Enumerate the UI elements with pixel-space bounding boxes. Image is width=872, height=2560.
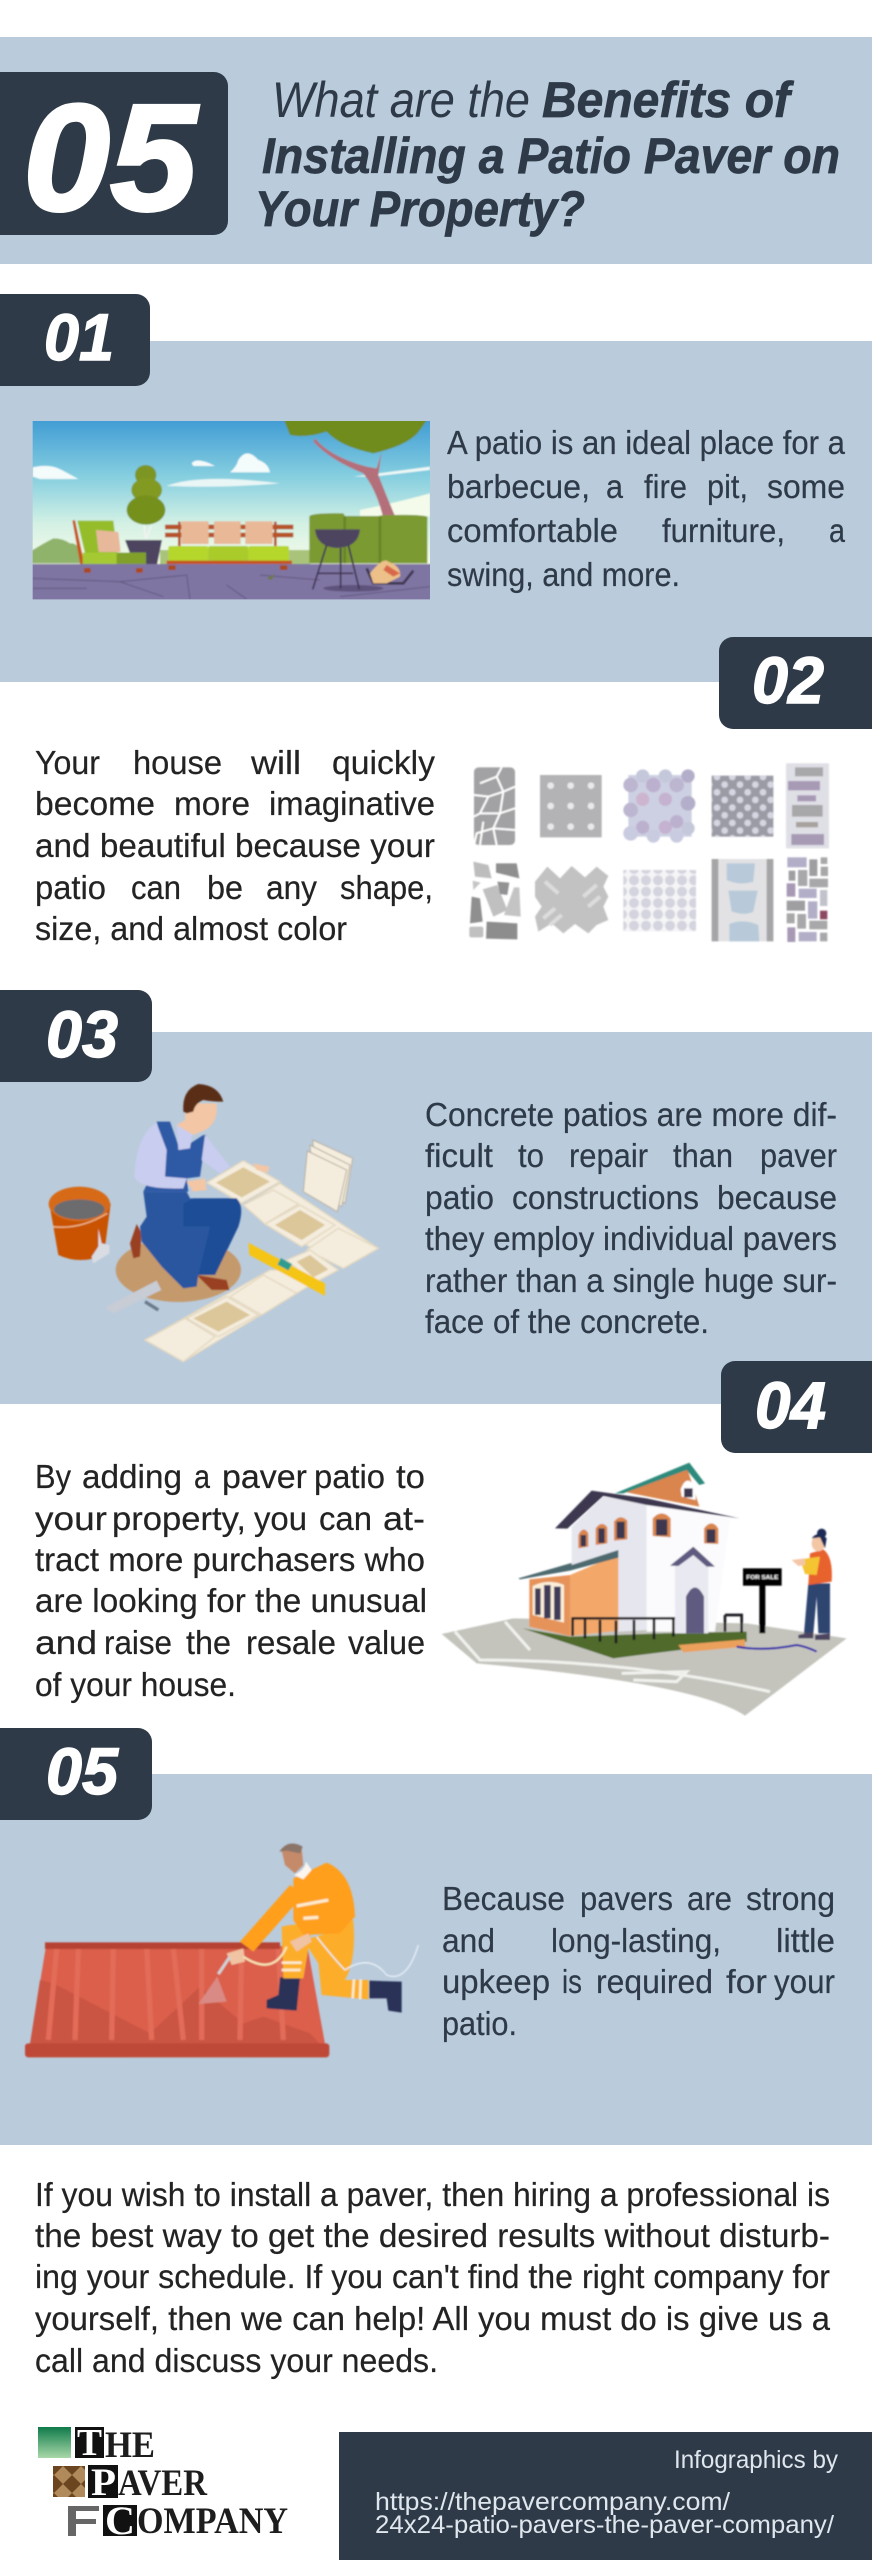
- for sale sign: FOR SALE: [746, 1575, 779, 1581]
- text: section 3: paver: [760, 1137, 837, 1174]
- text: section 5: long-lasting,: [551, 1922, 721, 1959]
- illustration: man pressure washing paver surface: [25, 1843, 418, 2057]
- text: section 3: to: [518, 1137, 544, 1174]
- panel: section 5 band: [0, 1774, 872, 2145]
- text: section 4: [35, 1458, 427, 1703]
- text: section 2: become: [35, 785, 155, 822]
- panel: footer credit: https://thepavercompany.com/: [375, 2488, 730, 2516]
- text: closing paragraph: call and discuss your needs.: [35, 2342, 438, 2379]
- badge: 04: 04: [755, 1368, 826, 1442]
- swatch: diamond lattice: [712, 776, 773, 837]
- text: section 4: value: [348, 1624, 425, 1661]
- text: section 1: barbecue,: [447, 468, 590, 505]
- badge: 05: [0, 1728, 152, 1820]
- text: section 3: Concrete patios are more dif-: [425, 1096, 837, 1133]
- text: section 4: the: [186, 1624, 231, 1661]
- text: section 2: size, and almost color: [35, 910, 347, 947]
- text: section 5: strong: [746, 1880, 835, 1917]
- badge: 03: [0, 990, 152, 1082]
- text: section 3: constructions: [512, 1179, 699, 1216]
- text: section 4: of your house.: [35, 1666, 236, 1703]
- text: section 5: for: [726, 1963, 767, 2000]
- panel: footer credit: 24x24-patio-pavers-the-paver-company/: [375, 2511, 834, 2539]
- swatch: hexagon mosaic: [623, 769, 695, 843]
- text: section 4: resale: [246, 1624, 336, 1661]
- head: [279, 1843, 312, 1879]
- text: section 3: face of the concrete.: [425, 1303, 709, 1340]
- paver surface: [25, 1942, 329, 2057]
- logo: The Paver Company: C: [105, 2498, 135, 2543]
- text: section 5: are: [687, 1880, 732, 1917]
- text: section 5: upkeep: [442, 1963, 550, 2000]
- illustration: patio with furniture and grill: [30, 418, 433, 602]
- panel: section 3 band: [0, 1032, 872, 1404]
- text: section 1: fire: [644, 468, 687, 505]
- legs: [282, 1920, 368, 1999]
- for sale sign: [743, 1568, 782, 1633]
- text: section 1: a: [829, 512, 846, 549]
- spray: [198, 1977, 227, 2004]
- fence: [572, 1615, 742, 1643]
- text: section 2: will: [250, 744, 301, 781]
- logo: The Paver Company: AVER: [118, 2463, 208, 2504]
- spirit level: [248, 1243, 325, 1296]
- text: section 1: A patio is an ideal place for a: [447, 424, 846, 461]
- text: closing paragraph: yourself, then we can help! All you must do is give us a: [35, 2300, 831, 2337]
- text: section 2: Your: [35, 744, 100, 781]
- swatch: path with blue stones: [712, 859, 773, 941]
- text: section 2: quickly: [332, 744, 436, 781]
- badge: 02: [719, 637, 872, 729]
- text: section 4: adding: [82, 1458, 182, 1495]
- text: closing paragraph: the best way to get the desired results without disturb-: [35, 2217, 830, 2254]
- text: section 2: [35, 744, 436, 947]
- swatch: pebble mosaic: [623, 870, 696, 932]
- head: [177, 1084, 223, 1135]
- badge: big number 05: 05: [23, 73, 200, 243]
- text: section 2: more: [174, 785, 250, 822]
- text: section 1: swing, and more.: [447, 556, 680, 593]
- text: section 2: be: [207, 869, 243, 906]
- text: section 1: a: [606, 468, 624, 505]
- text: section 4: to: [396, 1458, 425, 1495]
- text: section 4: are looking for the unusual: [35, 1582, 427, 1619]
- text: section 3: than: [673, 1137, 733, 1174]
- text: section 2: any: [266, 869, 317, 906]
- text: section 5: required: [596, 1963, 713, 2000]
- title: What are the: [272, 72, 530, 128]
- mat: [116, 1238, 241, 1302]
- swatch: square grid: [540, 775, 602, 837]
- hands: [187, 1163, 269, 1192]
- text: section 5: little: [776, 1922, 835, 1959]
- badge: 02: 02: [752, 643, 824, 717]
- boots: [267, 1977, 402, 2013]
- text: closing paragraph: If you wish to install a paver, then hiring a professional is: [35, 2176, 830, 2213]
- woman: [792, 1529, 832, 1640]
- logo: The Paver Company: P: [91, 2461, 116, 2504]
- shoes: [130, 1224, 142, 1258]
- text: closing paragraph: ing your schedule. If you can't find the right company for: [35, 2258, 830, 2295]
- text: section 3: ficult: [425, 1137, 493, 1174]
- dormer: [615, 1463, 705, 1507]
- text: section 4: By: [35, 1458, 71, 1495]
- panel: footer credit: Infographics by: [674, 2446, 838, 2474]
- text: section 5: is: [562, 1963, 582, 2000]
- title: Installing a Patio Paver on: [262, 128, 840, 184]
- title: [255, 72, 840, 237]
- text: section 2: can: [131, 869, 181, 906]
- logo: The Paver Company: HE: [105, 2425, 155, 2466]
- panel: footer credit: [339, 2432, 872, 2560]
- panel: title band: [0, 37, 872, 264]
- text: section 2: patio: [35, 869, 106, 906]
- badge: 01: 01: [44, 300, 114, 374]
- text: section 4: at-: [383, 1500, 425, 1537]
- text: section 1: [447, 424, 846, 593]
- text: section 5: [442, 1880, 835, 2042]
- text: section 4: a: [194, 1458, 211, 1495]
- paver tiles: [145, 1161, 378, 1362]
- squeegee: [105, 1281, 161, 1313]
- lawn: [523, 1628, 747, 1658]
- porch and door: [670, 1547, 715, 1633]
- text: section 4: your: [35, 1500, 107, 1537]
- text: section 5: and: [442, 1922, 495, 1959]
- logo: The Paver Company: [38, 2422, 288, 2543]
- text: section 4: patio: [314, 1458, 385, 1495]
- tile stack: [303, 1140, 353, 1212]
- shirt: [134, 1123, 230, 1189]
- main roof: [555, 1491, 739, 1529]
- logo: The Paver Company: OMPANY: [137, 2501, 288, 2542]
- text: section 4: and: [35, 1624, 97, 1661]
- title: Benefits of: [542, 72, 794, 128]
- swatch: ashlar strips: [786, 763, 829, 848]
- main walls: [572, 1497, 730, 1632]
- badge: 01: [0, 294, 150, 386]
- map ground: [442, 1618, 847, 1716]
- badge: 03: 03: [46, 997, 118, 1071]
- text: section 5: Because: [442, 1880, 565, 1917]
- text: section 3: [425, 1096, 837, 1340]
- swatch: flagstone: [474, 767, 515, 845]
- text: section 2: house: [133, 744, 222, 781]
- swatch: random brick: [787, 857, 828, 942]
- text: section 4: can: [319, 1500, 372, 1537]
- text: section 4: you: [254, 1500, 307, 1537]
- text: section 1: some: [767, 468, 845, 505]
- text: section 4: property,: [112, 1500, 246, 1537]
- bucket: [49, 1187, 111, 1263]
- torso and arm: [240, 1863, 355, 1952]
- annex: [518, 1549, 619, 1636]
- text: section 2: imaginative: [269, 785, 435, 822]
- overalls: [140, 1192, 241, 1288]
- badge: 04: [721, 1361, 872, 1453]
- text: section 1: pit,: [707, 468, 748, 505]
- title: Your Property?: [255, 181, 585, 237]
- text: section 3: repair: [569, 1137, 648, 1174]
- text: section 3: they employ individual pavers: [425, 1220, 837, 1257]
- text: section 2: shape,: [340, 869, 433, 906]
- text: section 4: raise: [104, 1624, 172, 1661]
- text: closing paragraph: [35, 2176, 831, 2379]
- text: section 1: furniture,: [662, 512, 785, 549]
- text: section 5: pavers: [580, 1880, 673, 1917]
- swatch: crazy paving: [469, 862, 521, 939]
- illustration: worker laying paver tiles: [49, 1084, 378, 1362]
- route line: [737, 1645, 817, 1652]
- text: section 3: rather than a single huge sur-: [425, 1262, 837, 1299]
- swatch: herringbone: [535, 866, 608, 933]
- step: [678, 1639, 745, 1652]
- badge: 05: 05: [46, 1734, 119, 1808]
- illustration: house for sale on map with woman: [442, 1463, 847, 1716]
- text: section 1: comfortable: [447, 512, 618, 549]
- hands and hose: [218, 1933, 418, 1976]
- text: section 4: tract more purchasers who: [35, 1541, 425, 1578]
- windows: [578, 1513, 718, 1548]
- text: section 3: because: [717, 1179, 837, 1216]
- panel: section 1 band: [0, 341, 872, 682]
- text: section 4: paver: [222, 1458, 307, 1495]
- logo: The Paver Company: T: [77, 2422, 102, 2464]
- text: section 5: patio.: [442, 2005, 517, 2042]
- text: section 5: your: [774, 1963, 835, 2000]
- illustration: paver pattern swatches: [469, 763, 829, 942]
- text: section 3: patio: [425, 1179, 494, 1216]
- text: section 2: and beautiful because your: [35, 827, 435, 864]
